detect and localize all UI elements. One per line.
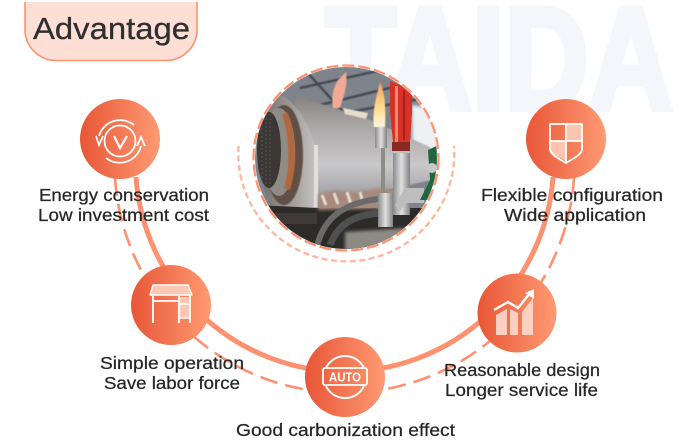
icon: desk bbox=[150, 285, 192, 323]
label: simple operation: Simple operation bbox=[100, 353, 244, 373]
node: good carbonization bbox=[305, 337, 385, 417]
label: flexible configuration: Wide application bbox=[504, 205, 646, 225]
icon: AUTO badge: AUTO bbox=[329, 370, 361, 384]
icon: rising chart bbox=[494, 289, 534, 335]
node: simple operation bbox=[131, 265, 211, 345]
label: reasonable design: Reasonable design bbox=[444, 360, 600, 380]
label: reasonable design: Longer service life bbox=[445, 380, 598, 400]
icon: shield bbox=[550, 124, 582, 163]
node: flexible configuration bbox=[526, 99, 606, 179]
decorative dashed ring under photo bbox=[238, 146, 454, 261]
label: good carbonization: Good carbonization effect bbox=[236, 420, 455, 440]
heading: Advantage bbox=[25, 2, 197, 60]
heading: Advantage: Advantage bbox=[33, 11, 190, 46]
icon: cycle with check bbox=[96, 120, 145, 163]
connector: dashed arc bbox=[115, 178, 574, 393]
node: energy conservation bbox=[80, 99, 160, 179]
label: energy conservation: Energy conservation bbox=[39, 185, 209, 205]
label: flexible configuration: Flexible configuration bbox=[481, 185, 663, 205]
photo: pyrolysis reactor bbox=[250, 60, 445, 260]
connector: solid arc bbox=[136, 177, 553, 372]
label: simple operation: Save labor force bbox=[104, 373, 240, 393]
label: energy conservation: Low investment cost bbox=[38, 205, 209, 225]
node: reasonable design bbox=[478, 274, 556, 352]
